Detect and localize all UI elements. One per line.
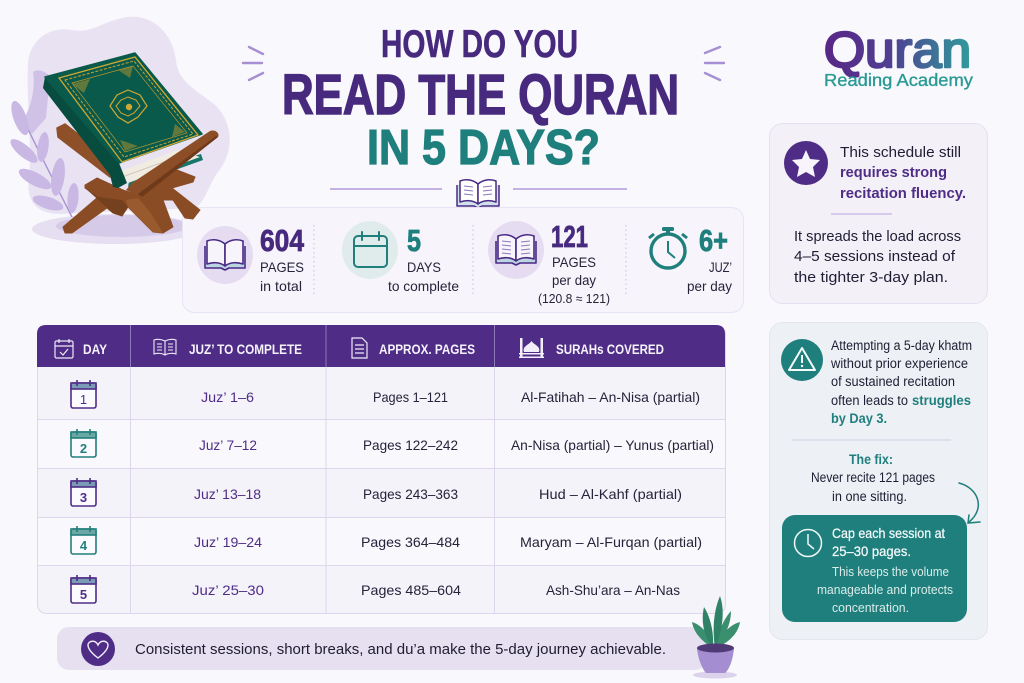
callout: session cap: manageable and protects <box>817 582 953 597</box>
logo: Quran Reading Academy: Reading Academy <box>824 70 973 90</box>
row: day 5: Pages 485–604 <box>361 582 461 598</box>
stat: 121 pages per day: PAGES <box>552 254 596 270</box>
wooden stand: base silhouette <box>63 170 200 233</box>
row: day 2: Pages 122–242 <box>363 437 458 453</box>
row: day 4 <box>71 526 702 554</box>
icon: warning triangle <box>781 339 823 381</box>
banner: closing message <box>57 627 707 670</box>
wooden stand: front plank <box>126 131 219 197</box>
callout: session cap: Cap each session at <box>832 525 945 541</box>
row: day 5: 5 <box>80 587 87 602</box>
title sparks <box>243 47 724 80</box>
panel: warning and fix: The fix: <box>849 451 893 467</box>
title <box>282 23 679 175</box>
table: 5-day schedule <box>37 325 726 614</box>
row: day 1: 1 <box>80 392 87 407</box>
stat: 604 pages: in total <box>260 278 302 294</box>
panel: warning and fix <box>770 322 988 640</box>
row: day 2 <box>71 429 714 457</box>
table header: JUZ’ TO COMPLETE <box>189 342 302 357</box>
title divider with book icon <box>330 180 627 208</box>
panel: fluency note <box>770 124 988 304</box>
table header: DAY <box>83 342 107 357</box>
icon: potted plant <box>692 596 740 678</box>
callout: session cap: concentration. <box>832 600 909 615</box>
table header: SURAHs COVERED <box>556 342 664 357</box>
panel: warning and fix: often leads to <box>831 393 908 408</box>
book: gold borders <box>59 57 198 162</box>
illustration background: blob, ground and leaves <box>7 17 230 244</box>
row: day 3 <box>71 478 682 506</box>
row: day 2: Juz’ 7–12 <box>199 437 257 453</box>
row: day 4: Maryam – Al-Furqan (partial) <box>520 534 702 550</box>
stat: 121 pages per day: 121 <box>551 219 588 254</box>
logo: Quran Reading Academy: Quran <box>824 22 971 78</box>
panel: warning and fix: Never recite 121 pages <box>811 470 935 485</box>
icon: header book <box>154 339 176 355</box>
row: day 2: An-Nisa (partial) – Yunus (partial) <box>511 437 714 453</box>
title: HOW DO YOU <box>381 23 578 66</box>
stat: 6+ juz per day: 6+ <box>699 223 728 258</box>
book: cover <box>45 53 202 163</box>
row: day 5: Ash-Shu’ara – An-Nas <box>546 582 680 598</box>
banner: closing message: Consistent sessions, short breaks, and du’a make the 5-day journey achievable. <box>135 642 666 658</box>
stat: 5 days: to complete <box>388 278 459 294</box>
arrow: to session cap <box>959 483 980 523</box>
table header: APPROX. PAGES <box>379 342 475 357</box>
row: day 3: Pages 243–363 <box>363 486 458 502</box>
stat: 6+ juz per day <box>649 223 732 294</box>
panel: fluency note: recitation fluency. <box>840 186 966 202</box>
table header <box>37 325 725 367</box>
callout: session cap: This keeps the volume <box>832 564 949 579</box>
row: day 1 <box>71 380 700 408</box>
stat: 604 pages <box>197 223 305 294</box>
stat: 121 pages per day: per day <box>552 273 596 288</box>
row: day 3: Juz’ 13–18 <box>194 486 261 502</box>
row: day 2: 2 <box>80 441 87 456</box>
panel: warning and fix: of sustained recitation <box>831 374 955 389</box>
panel: fluency note: 4–5 sessions instead of <box>794 249 956 265</box>
panel: warning and fix: struggles <box>912 393 971 408</box>
panel: fluency note: the tighter 3-day plan. <box>794 270 948 286</box>
stat: 121 pages per day <box>488 219 610 306</box>
panel: fluency note: It spreads the load across <box>794 229 961 245</box>
title: IN 5 DAYS? <box>367 121 600 175</box>
book: back cover and pages <box>128 154 203 187</box>
panel: key stats <box>182 208 744 312</box>
row: day 3: Hud – Al-Kahf (partial) <box>539 486 682 502</box>
row: day 3: 3 <box>80 490 87 505</box>
row: day 1: Al-Fatihah – An-Nisa (partial) <box>521 389 700 405</box>
book: spine <box>43 77 127 188</box>
row: day 1: Juz’ 1–6 <box>201 389 254 405</box>
panel: warning and fix: without prior experience <box>830 356 968 371</box>
panel: warning and fix: by Day 3. <box>831 411 887 426</box>
row: day 4: Juz’ 19–24 <box>194 534 262 550</box>
stat: 5 days <box>342 221 459 294</box>
stat: 5 days: 5 <box>407 223 421 258</box>
row: day 4: Pages 364–484 <box>361 534 460 550</box>
wooden stand: rear plank <box>57 124 115 177</box>
stat: 604 pages: PAGES <box>260 259 304 275</box>
panel: warning and fix: Attempting a 5-day khatm <box>831 338 972 353</box>
panel: fluency note: This schedule still <box>840 145 961 161</box>
panel: warning and fix: in one sitting. <box>832 489 907 504</box>
row: day 1: Pages 1–121 <box>373 389 448 405</box>
row: day 4: 4 <box>80 538 88 553</box>
title: READ THE QURAN <box>282 63 679 127</box>
row: day 5 <box>71 575 680 603</box>
stat: 6+ juz per day: per day <box>687 279 732 294</box>
stat: 604 pages: 604 <box>260 223 305 258</box>
stat: 121 pages per day: (120.8 ≈ 121) <box>538 291 610 306</box>
icon: header document <box>352 338 367 358</box>
illustration: Quran on wooden stand <box>43 53 219 233</box>
stat: 6+ juz per day: JUZ’ <box>709 259 732 275</box>
panel: fluency note: requires strong <box>840 165 947 181</box>
row: day 5: Juz’ 25–30 <box>192 582 264 598</box>
callout: session cap <box>782 515 967 622</box>
icon: header mosque <box>519 338 544 358</box>
callout: session cap: 25–30 pages. <box>832 543 911 559</box>
icon: star <box>784 141 828 185</box>
stat: 5 days: DAYS <box>407 259 441 275</box>
icon: header calendar <box>55 339 73 358</box>
